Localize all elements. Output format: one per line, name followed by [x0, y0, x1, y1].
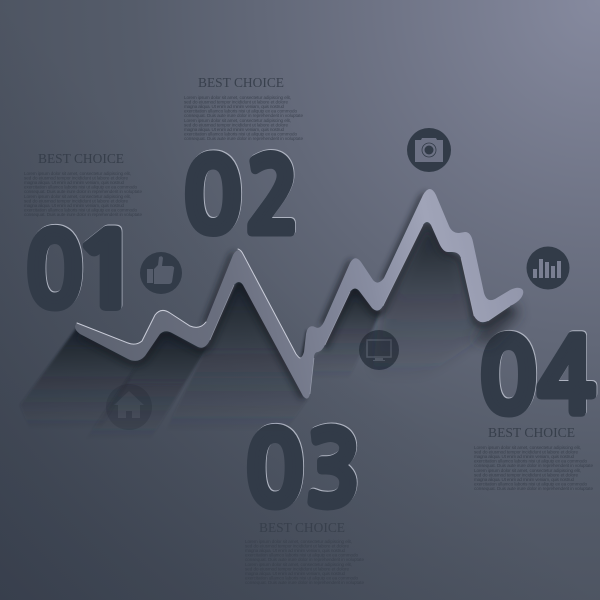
text block 03: magna aliqua. Ut enim ad minim veniam, quis nostrud	[245, 571, 345, 576]
numeral 02: 0	[184, 146, 243, 247]
text block 02: sed do eiusmod tempor incididunt ut labore et dolore	[184, 100, 288, 104]
numeral 01: 0	[26, 221, 84, 322]
heading 01: BEST CHOICE	[38, 151, 124, 166]
numeral 02: 2	[246, 147, 300, 248]
text block 04: exercitation ullamco laboris nisi ut aliquip ex ea commodo	[474, 482, 587, 486]
text block 03: Lorem ipsum dolor sit amet, consectetur adipiscing elit,	[245, 539, 352, 544]
text block 04: consequat. Duis aute irure dolor in reprehenderit in voluptate	[474, 463, 593, 468]
heading 04: BEST CHOICE	[488, 425, 575, 440]
text block 01: exercitation ullamco laboris nisi ut aliquip ex ea commodo	[24, 184, 137, 190]
text block 03: sed do eiusmod tempor incididunt ut labore et dolore	[245, 566, 349, 572]
text block 04: magna aliqua. Ut enim ad minim veniam, quis nostrud	[474, 454, 574, 459]
text block 03: exercitation ullamco laboris nisi ut aliquip ex ea commodo	[245, 576, 358, 580]
text block 03	[245, 539, 364, 585]
icon: monitor	[359, 330, 399, 370]
icon: camera	[407, 128, 451, 172]
ribbon top highlight	[77, 249, 300, 358]
text block 01: sed do eiusmod tempor incididunt ut labore et dolore	[24, 198, 128, 204]
text block 01: sed do eiusmod tempor incididunt ut labore et dolore	[24, 176, 128, 180]
text block 01: consequat. Duis aute irure dolor in reprehenderit in voluptate	[24, 189, 142, 194]
text block 01: Lorem ipsum dolor sit amet, consectetur adipiscing elit,	[24, 171, 131, 176]
icon: home	[106, 384, 152, 430]
text block 01	[24, 171, 142, 217]
numeral 01	[26, 221, 145, 322]
text block 02: magna aliqua. Ut enim ad minim veniam, quis nostrud	[184, 127, 284, 132]
text block 03: exercitation ullamco laboris nisi ut aliquip ex ea commodo	[245, 552, 358, 558]
panel: step 02	[183, 75, 303, 248]
text block 01: exercitation ullamco laboris nisi ut aliquip ex ea commodo	[24, 208, 137, 212]
numeral 04: 4	[538, 328, 596, 428]
numeral 02: 2	[246, 146, 300, 247]
text block 01: Lorem ipsum dolor sit amet, consectetur adipiscing elit,	[24, 194, 131, 199]
heading 03: BEST CHOICE	[259, 520, 345, 535]
text block 02	[184, 95, 303, 141]
text block 02: sed do eiusmod tempor incididunt ut labore et dolore	[184, 122, 288, 128]
numeral 03: 3	[306, 420, 361, 521]
text block 01: consequat. Duis aute irure dolor in reprehenderit in voluptate	[24, 212, 142, 217]
numeral 01: 1	[72, 222, 144, 322]
numeral 02	[183, 146, 300, 248]
text block 03: consequat. Duis aute irure dolor in reprehenderit in voluptate	[245, 580, 364, 585]
panel: step 01	[24, 151, 145, 322]
long shadows of line	[20, 190, 520, 440]
text block 03: sed do eiusmod tempor incididunt ut labore et dolore	[245, 544, 349, 548]
text block 04: Lorem ipsum dolor sit amet, consectetur adipiscing elit,	[474, 445, 581, 450]
text block 04: consequat. Duis aute irure dolor in reprehenderit in voluptate	[474, 486, 593, 491]
numeral 03: 0	[245, 420, 304, 522]
text block 04: sed do eiusmod tempor incididunt ut labore et dolore	[474, 472, 578, 478]
heading 02: BEST CHOICE	[198, 75, 284, 90]
text block 02: consequat. Duis aute irure dolor in reprehenderit in voluptate	[184, 113, 303, 118]
numeral 02: 0	[183, 147, 242, 248]
numeral 01: 0	[26, 222, 84, 322]
text block 02: exercitation ullamco laboris nisi ut aliquip ex ea commodo	[184, 108, 297, 114]
numeral 03	[245, 420, 361, 522]
numeral 04: 4	[538, 327, 596, 428]
line chart ribbon	[75, 189, 523, 399]
text block 01: magna aliqua. Ut enim ad minim veniam, quis nostrud	[24, 203, 124, 208]
text block 02: Lorem ipsum dolor sit amet, consectetur adipiscing elit,	[184, 95, 291, 100]
numeral 01: 1	[73, 221, 145, 322]
text block 02: consequat. Duis aute irure dolor in reprehenderit in voluptate	[184, 136, 303, 141]
numeral 04	[479, 327, 596, 428]
icon: thumbs up	[140, 252, 182, 294]
text block 02: Lorem ipsum dolor sit amet, consectetur adipiscing elit,	[184, 118, 291, 123]
ribbon lower highlight	[210, 225, 510, 394]
text block 04: Lorem ipsum dolor sit amet, consectetur adipiscing elit,	[474, 468, 581, 473]
text block 03: Lorem ipsum dolor sit amet, consectetur adipiscing elit,	[245, 562, 352, 567]
text block 04: exercitation ullamco laboris nisi ut aliquip ex ea commodo	[474, 458, 587, 464]
numeral 04: 0	[480, 327, 538, 428]
numeral 04: 0	[479, 328, 537, 428]
panel: step 04	[474, 327, 596, 491]
icon: bar chart	[526, 246, 570, 290]
panel: step 03	[245, 420, 364, 585]
text block 02: magna aliqua. Ut enim ad minim veniam, quis nostrud	[184, 104, 284, 109]
text block 04	[474, 445, 593, 491]
numeral 03: 3	[306, 420, 361, 522]
text block 01: magna aliqua. Ut enim ad minim veniam, quis nostrud	[24, 180, 124, 185]
text block 02: exercitation ullamco laboris nisi ut aliquip ex ea commodo	[184, 132, 297, 136]
text block 03: magna aliqua. Ut enim ad minim veniam, quis nostrud	[245, 548, 345, 553]
numeral 03: 0	[246, 420, 305, 521]
text block 04: magna aliqua. Ut enim ad minim veniam, quis nostrud	[474, 477, 574, 482]
text block 04: sed do eiusmod tempor incididunt ut labore et dolore	[474, 450, 578, 454]
text block 03: consequat. Duis aute irure dolor in reprehenderit in voluptate	[245, 557, 364, 562]
